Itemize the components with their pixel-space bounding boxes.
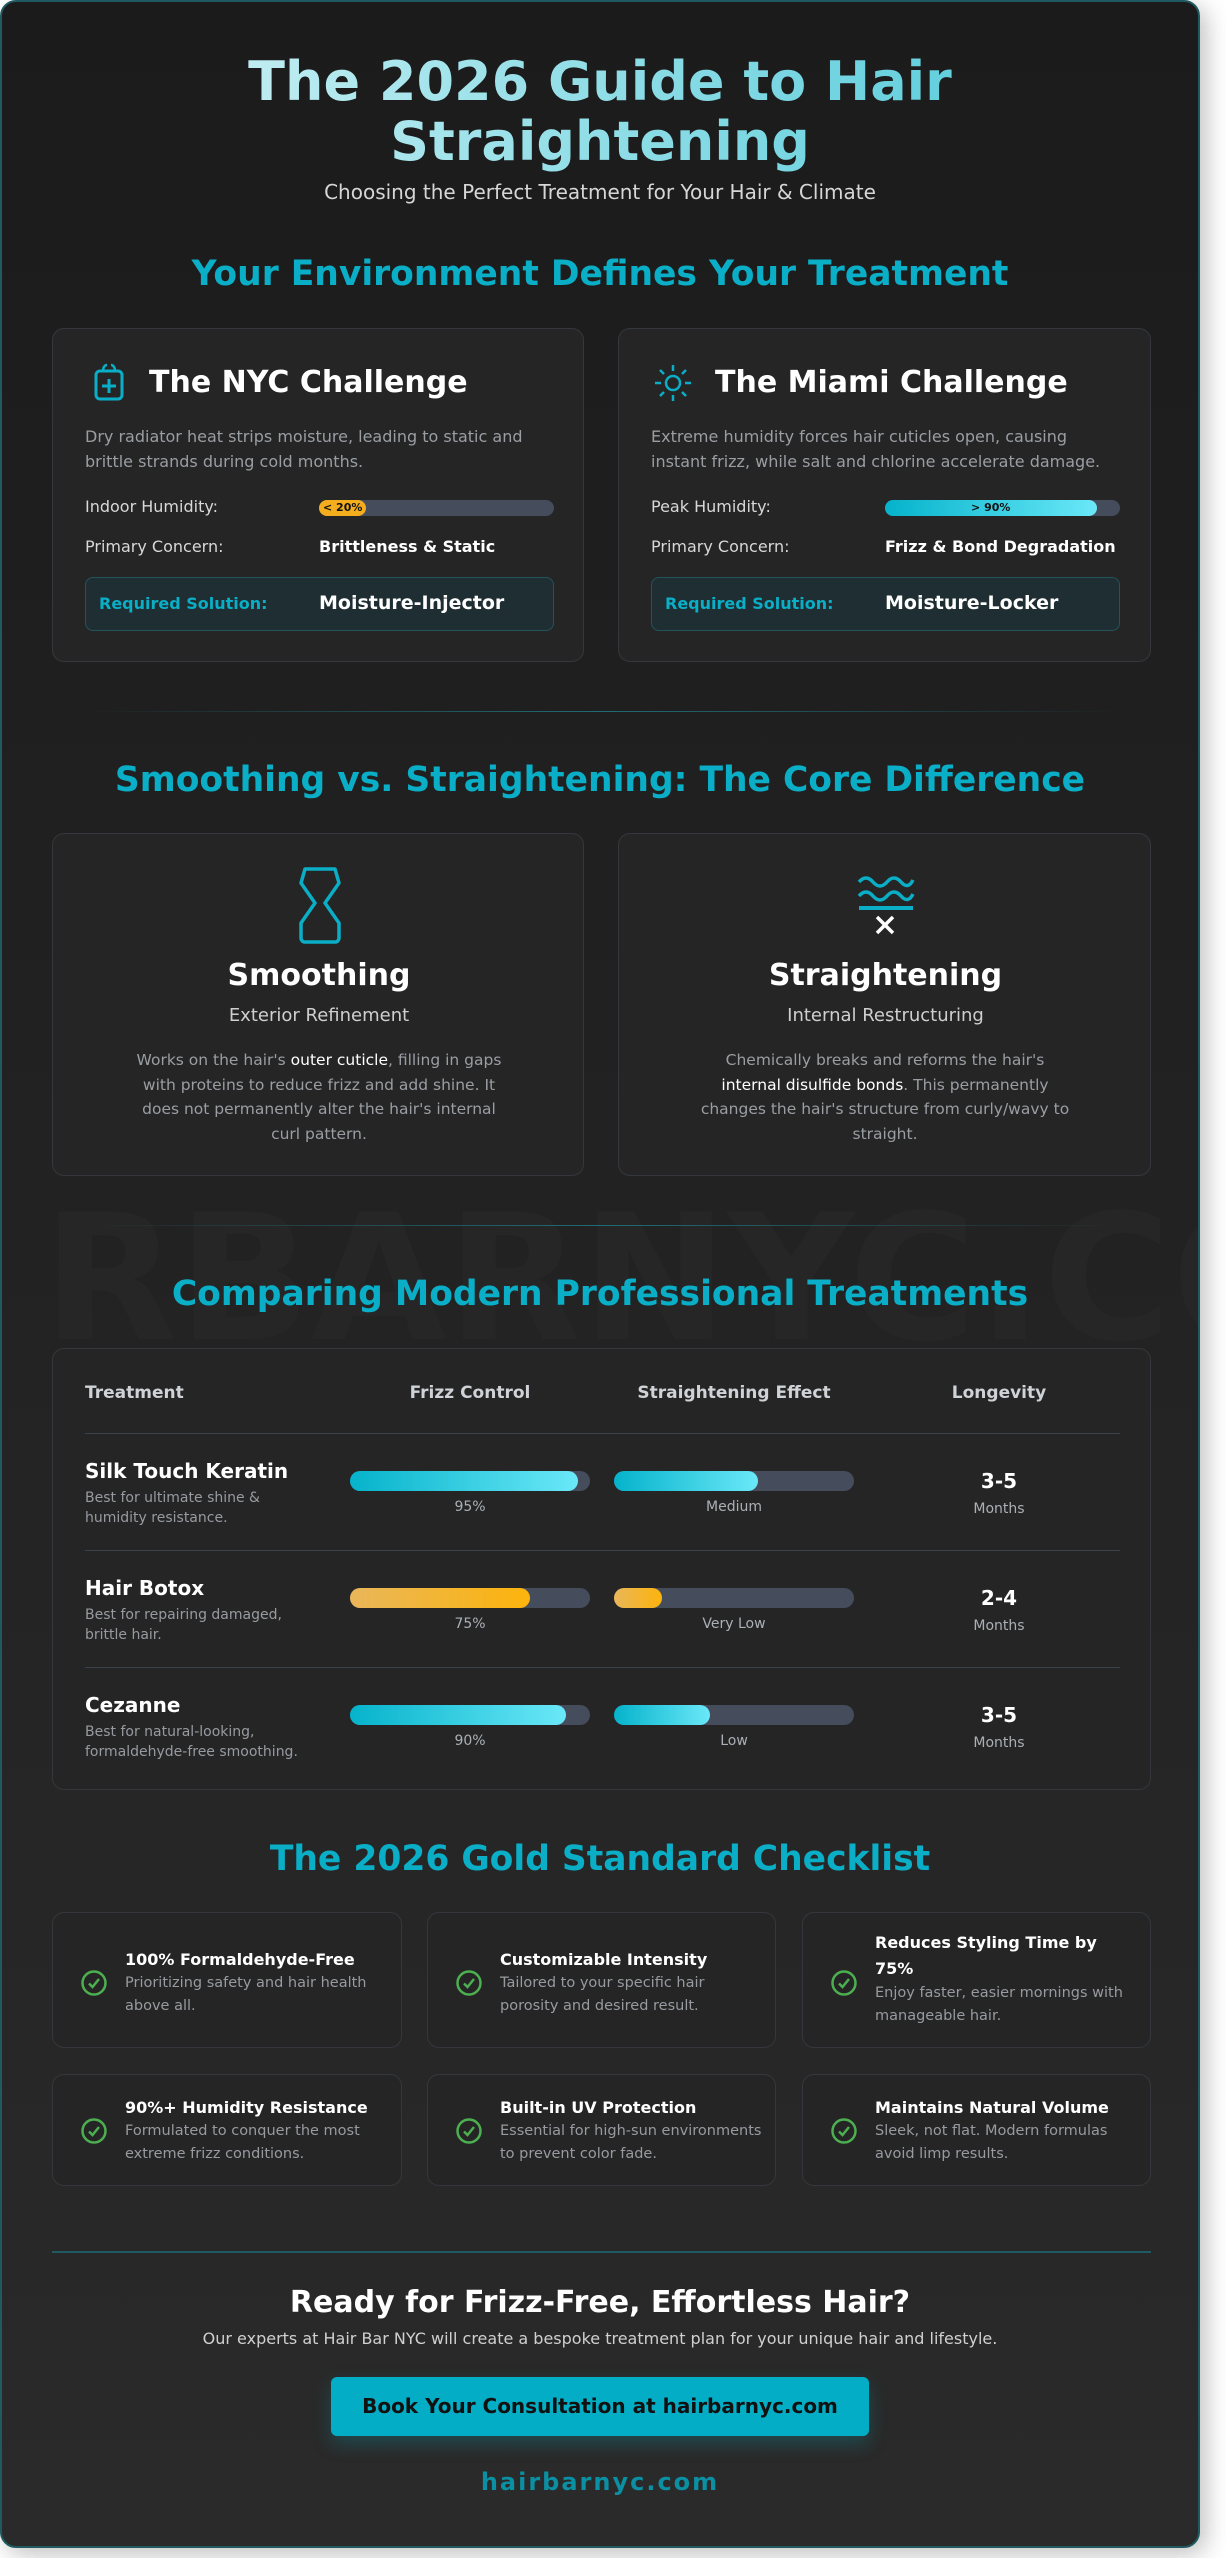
icon: waves cross: [858, 876, 914, 934]
panel: Miami: [618, 328, 1151, 662]
item: customizable intensity: Tailored to your specific hair porosity and desired result.: [500, 1975, 704, 2014]
item: formaldehyde-free: [52, 1912, 402, 2048]
row: Silk Touch Keratin: Silk Touch Keratin: [85, 1459, 288, 1483]
row: Cezanne: 3-5: [981, 1703, 1017, 1727]
row: Cezanne: [85, 1693, 1025, 1760]
item: customizable intensity: Customizable Intensity: [500, 1950, 707, 1969]
item: customizable intensity: [427, 1912, 776, 2048]
Miami solution box: Moisture-Locker: [885, 592, 1058, 614]
item: formaldehyde-free: Prioritizing safety and hair health above all.: [125, 1975, 367, 2014]
panel: Miami: > 90%: [971, 501, 1010, 514]
CTA subtext: Our experts at Hair Bar NYC will create a bespoke treatment plan for your unique hair and lifestyle.: [203, 2329, 997, 2348]
smoothing subtitle: Exterior Refinement: [229, 1005, 409, 1026]
straightening title: Straightening: [769, 958, 1002, 993]
NYC title: The NYC Challenge: [149, 365, 468, 400]
item: styling time: Enjoy faster, easier mornings with manageable hair.: [875, 1985, 1123, 2024]
item: humidity resistance: [52, 2074, 402, 2186]
icon: sun: [655, 365, 691, 401]
item: humidity resistance: 90%+ Humidity Resistance: [125, 2098, 368, 2117]
heading: comparing treatments: Comparing Modern Professional Treatments: [172, 1274, 1028, 1314]
row: Cezanne: Best for natural-looking, formaldehyde-free smoothing.: [85, 1724, 298, 1760]
row: Silk Touch Keratin: [85, 1459, 1025, 1526]
icon: radiator: [94, 364, 124, 400]
title: [2, 52, 1198, 172]
row: Silk Touch Keratin: 3-5: [981, 1469, 1017, 1493]
Miami humidity row: Peak Humidity:: [651, 497, 771, 516]
row: Hair Botox: Hair Botox: [85, 1576, 204, 1600]
item: UV protection: Built-in UV Protection: [500, 2098, 696, 2117]
checklist grid: [52, 1912, 1151, 2186]
icon: hourglass: [299, 867, 341, 944]
item: natural volume: Sleek, not flat. Modern formulas avoid limp results.: [875, 2123, 1107, 2162]
NYC humidity row: Indoor Humidity:: [85, 497, 218, 516]
table header: Straightening Effect: [637, 1383, 831, 1403]
row: Hair Botox: Months: [973, 1618, 1025, 1634]
heading: smoothing vs straightening: Smoothing vs. Straightening: The Core Difference: [115, 760, 1085, 800]
item: natural volume: [802, 2074, 1151, 2186]
panel: NYC: < 20%: [323, 501, 362, 514]
item: styling time: Reduces Styling Time by 75%: [875, 1933, 1097, 1978]
heading: environment: Your Environment Defines Your Treatment: [192, 254, 1008, 294]
heading: checklist: The 2026 Gold Standard Checklist: [270, 1839, 930, 1879]
NYC concern row: Primary Concern:: [85, 537, 223, 556]
smoothing title: Smoothing: [228, 958, 410, 993]
smoothing description: Works on the hair's outer cuticle, filling in gaps with proteins to reduce frizz and add shine. It does not permanently alter the hair's internal curl pattern.: [137, 1051, 501, 1142]
Miami title: The Miami Challenge: [715, 365, 1068, 400]
row: Hair Botox: 2-4: [981, 1586, 1017, 1610]
Miami description: Extreme humidity forces hair cuticles open, causing instant frizz, while salt and chlorine accelerate damage.: [651, 427, 1100, 471]
CTA button: Book Your Consultation at hairbarnyc.com: [362, 2394, 838, 2418]
row: Cezanne: Cezanne: [85, 1693, 180, 1717]
table header: [85, 1383, 1046, 1403]
panel: comparison table: [52, 1348, 1151, 1790]
item: natural volume: Maintains Natural Volume: [875, 2098, 1109, 2117]
NYC description: Dry radiator heat strips moisture, leading to static and brittle strands during cold months.: [85, 427, 522, 471]
NYC solution box: Required Solution:: [99, 594, 268, 613]
panel: NYC: [52, 328, 584, 662]
row: Silk Touch Keratin: Medium: [706, 1499, 762, 1515]
table header: Treatment: [85, 1383, 184, 1403]
item: UV protection: [427, 2074, 776, 2186]
item: styling time: [802, 1912, 1151, 2048]
NYC solution box: Moisture-Injector: [319, 592, 504, 614]
row: Cezanne: Months: [973, 1735, 1025, 1751]
item: formaldehyde-free: 100% Formaldehyde-Free: [125, 1950, 355, 1969]
title: The 2026 Guide to Hair Straightening: [248, 50, 952, 173]
row: Hair Botox: Very Low: [702, 1616, 766, 1632]
row: Silk Touch Keratin: 95%: [454, 1499, 486, 1515]
CTA button: [331, 2377, 869, 2436]
item: UV protection: Essential for high-sun environments to prevent color fade.: [500, 2123, 761, 2162]
footer url: hairbarnyc.com: [481, 2468, 719, 2496]
panel: NYC: Brittleness & Static: [319, 537, 495, 556]
panel: straightening: [618, 833, 1151, 1176]
NYC solution box: [85, 577, 554, 631]
panel: smoothing: [52, 833, 584, 1176]
row: Cezanne: 90%: [454, 1733, 486, 1749]
straightening description: Chemically breaks and reforms the hair's internal disulfide bonds. This permanently changes the hair's structure from curly/wavy to straight.: [701, 1051, 1069, 1142]
row: Silk Touch Keratin: Months: [973, 1501, 1025, 1517]
row: Silk Touch Keratin: Best for ultimate shine & humidity resistance.: [85, 1490, 260, 1526]
item: humidity resistance: Formulated to conquer the most extreme frizz conditions.: [125, 2123, 360, 2162]
table header: Longevity: [952, 1383, 1046, 1403]
Miami concern row: Primary Concern:: [651, 537, 789, 556]
panel: Miami: Frizz & Bond Degradation: [885, 537, 1116, 556]
Miami solution box: [651, 577, 1120, 631]
table header: Frizz Control: [410, 1383, 530, 1403]
row: Hair Botox: 75%: [454, 1616, 486, 1632]
row: Hair Botox: Best for repairing damaged, brittle hair.: [85, 1607, 282, 1643]
CTA heading: Ready for Frizz-Free, Effortless Hair?: [290, 2285, 910, 2320]
Miami solution box: Required Solution:: [665, 594, 834, 613]
row: Hair Botox: [85, 1576, 1025, 1643]
row: Cezanne: Low: [720, 1733, 748, 1749]
straightening subtitle: Internal Restructuring: [787, 1005, 984, 1026]
subtitle: Choosing the Perfect Treatment for Your Hair & Climate: [324, 180, 876, 204]
